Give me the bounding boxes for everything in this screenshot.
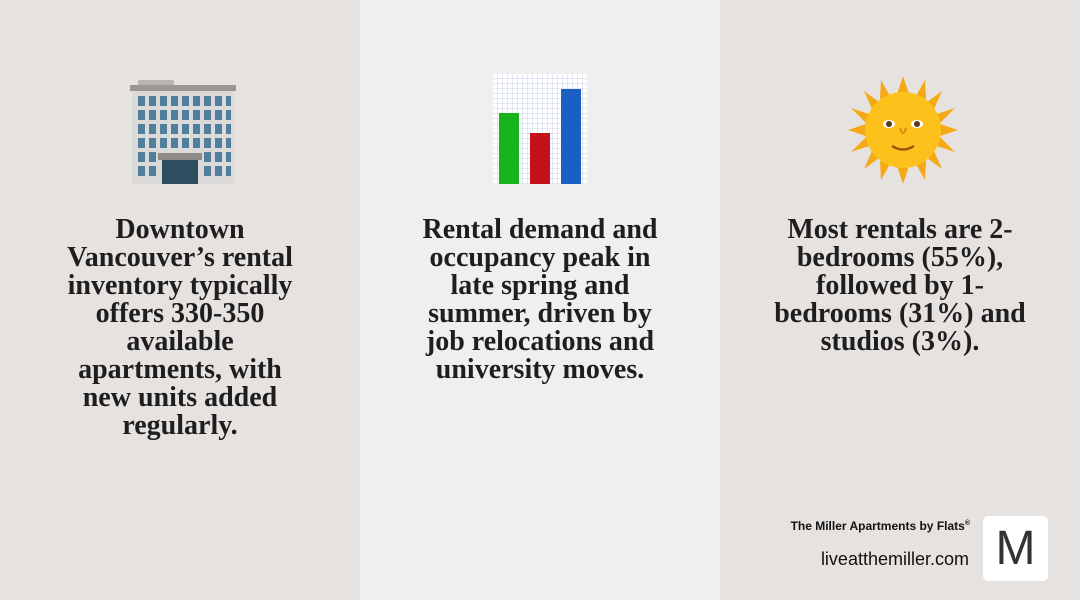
text: unit mix: followed by 1- — [816, 270, 984, 301]
icon: office building — [130, 80, 236, 184]
icon: bar chart — [493, 74, 587, 184]
text: inventory: new units added — [83, 382, 277, 413]
text: seasonality: university moves. — [436, 354, 644, 385]
text: inventory: regularly. — [122, 410, 238, 441]
logo: M — [983, 516, 1048, 581]
text: seasonality: Rental demand and — [423, 214, 657, 245]
text: inventory: Vancouver’s rental — [67, 242, 293, 273]
logo: M: M — [996, 522, 1035, 575]
text: inventory: offers 330-350 — [96, 298, 264, 329]
text: inventory: apartments, with — [78, 354, 282, 385]
panel: unit mix — [720, 0, 1080, 600]
text: unit mix: bedrooms (55%), — [797, 242, 1003, 273]
text: unit mix: bedrooms (31%) and — [774, 298, 1026, 329]
panel: inventory — [0, 0, 360, 600]
website: liveatthemiller.com — [821, 549, 969, 569]
text: seasonality: summer, driven by — [428, 298, 652, 329]
text: inventory — [67, 214, 293, 441]
text: seasonality — [422, 214, 658, 385]
text: inventory: inventory typically — [68, 270, 292, 301]
panel: seasonality — [360, 0, 720, 600]
text: unit mix: studios (3%). — [821, 326, 979, 357]
icon: sun with face — [848, 76, 958, 184]
text: unit mix: Most rentals are 2- — [787, 214, 1013, 245]
text: inventory: Downtown — [115, 214, 245, 245]
text: inventory: available — [126, 326, 234, 357]
brand name: The Miller Apartments by Flats® — [791, 519, 970, 533]
text: seasonality: occupancy peak in — [430, 242, 650, 273]
text: seasonality: job relocations and — [426, 326, 654, 357]
text: unit mix — [774, 214, 1026, 357]
text: seasonality: late spring and — [451, 270, 629, 301]
